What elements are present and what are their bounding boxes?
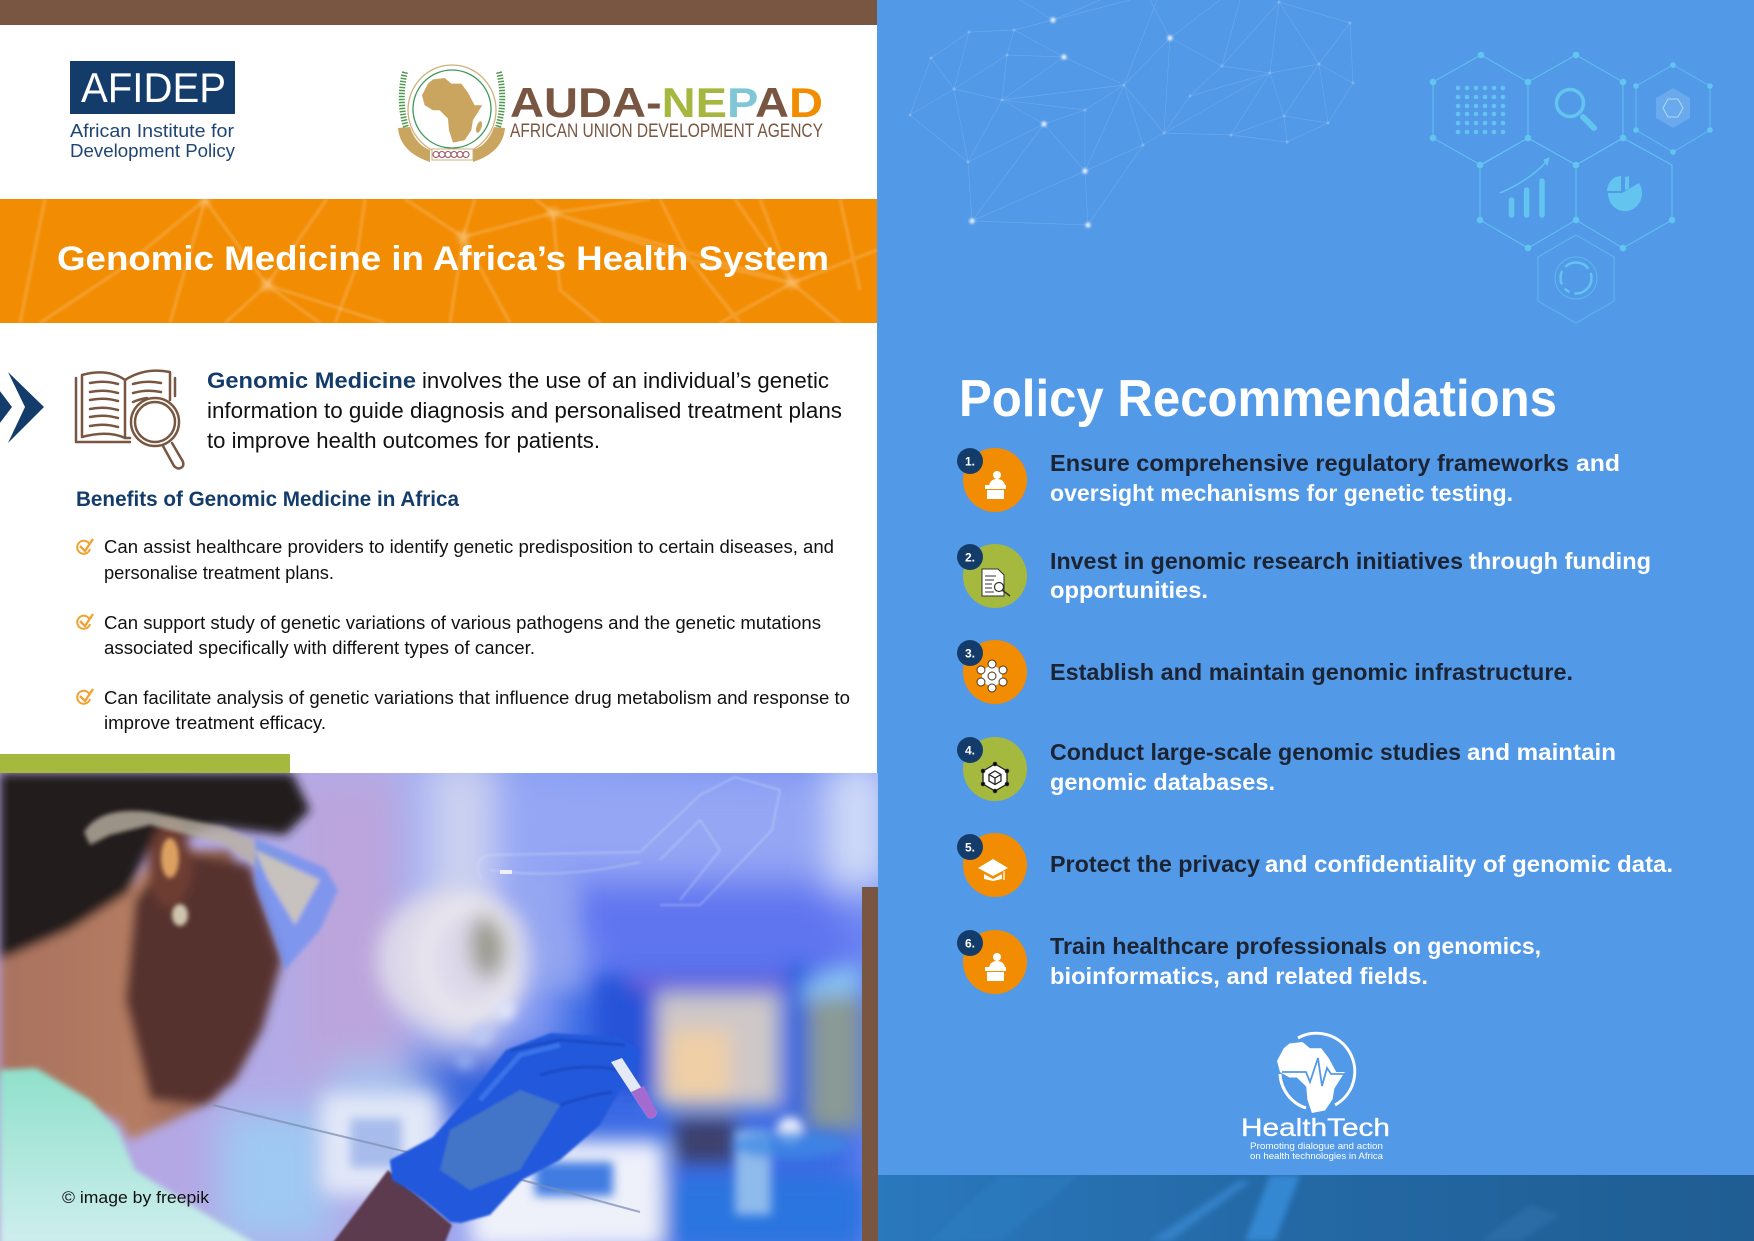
benefit 2: associated specifically with different types of cancer. [104,637,535,658]
chevron arrows [0,372,44,443]
AFIDEP logo: African Institute for [70,120,234,141]
decorative network [908,0,1354,228]
recommendation 1: and [1576,450,1620,476]
icon: dot matrix [1456,86,1505,134]
recommendation 5: and confidentiality of genomic data. [1265,851,1673,877]
recommendation 6: 6. [965,936,975,950]
AFIDEP logo [70,61,236,161]
recommendation 4 [957,737,1616,801]
glass flask reflection [478,777,780,905]
bottom decorative band [878,1175,1754,1241]
green accent bar [0,754,290,773]
benefits list [77,536,850,733]
benefit 1 [77,536,834,583]
recommendation 2: through funding [1469,548,1651,574]
recommendation 6: Train healthcare professionals [1050,933,1387,959]
recommendation 2: 2. [965,550,975,564]
title banner [0,196,877,323]
intro paragraph: involves the use of an individual’s genetic [422,368,829,393]
icon: small hexagon [1656,88,1690,128]
HealthTech logo [1241,1033,1390,1162]
intro paragraph: to improve health outcomes for patients. [207,428,600,453]
intro paragraph [207,368,842,453]
policy list [957,448,1673,994]
arm [331,1170,452,1241]
intro paragraph: Genomic Medicine [207,368,416,393]
recommendation 6: bioinformatics, and related fields. [1050,963,1428,989]
recommendation 2: opportunities. [1050,577,1208,603]
recommendation 6: on genomics, [1393,933,1541,959]
benefits heading: Benefits of Genomic Medicine in Africa [76,488,459,511]
safety goggles [84,811,338,970]
AFIDEP logo: AFIDEP [81,64,226,111]
glass sheet line [213,1105,640,1212]
left panel background [0,0,878,1241]
benefit 2: Can support study of genetic variations of various pathogens and the genetic mutations [104,612,821,633]
decorative hexagon icons [1430,52,1713,323]
title text: Genomic Medicine in Africa’s Health System [57,240,829,278]
icon: bar chart [1500,158,1549,215]
icon: book and magnifier [76,371,183,468]
top brown bar [0,0,877,25]
recommendation 4: Conduct large-scale genomic studies [1050,739,1461,765]
icon: search [1556,90,1594,128]
benefit 2 [77,612,821,658]
benefit 1: personalise treatment plans. [104,562,334,583]
photo: scientist holding test tube [0,760,890,1241]
recommendation 5 [957,833,1673,897]
benefit 3: improve treatment efficacy. [104,712,326,733]
icon: pie chart [1607,176,1642,211]
recommendation 4: and maintain [1467,739,1616,765]
HealthTech logo: on health technologies in Africa [1250,1151,1384,1162]
HealthTech logo: HealthTech [1241,1114,1390,1142]
recommendation 5: Protect the privacy [1050,851,1260,877]
photo credit: © image by freepik [62,1188,210,1207]
recommendation 3: 3. [965,646,975,660]
person [0,773,310,1140]
recommendation 1: 1. [965,454,975,468]
AUDA-NEPAD wordmark: AUDA- NEPAD [510,79,823,126]
recommendation 4: genomic databases. [1050,769,1275,795]
test tube [611,1058,657,1118]
recommendation 6 [957,930,1541,994]
heading: policy recommendations: Policy Recommendations [959,370,1557,428]
recommendation 4: 4. [965,744,975,758]
AUDA-NEPAD wordmark: AFRICAN UNION DEVELOPMENT AGENCY [510,121,823,142]
brown side bar [862,887,878,1241]
recommendation 5: 5. [965,840,975,854]
recommendation 2: Invest in genomic research initiatives [1050,548,1463,574]
icon: dashed ring [1555,257,1597,299]
benefit 1: Can assist healthcare providers to identify genetic predisposition to certain diseases, and [104,536,834,557]
benefit 3: Can facilitate analysis of genetic variations that influence drug metabolism and response to [104,687,850,708]
recommendation 1: Ensure comprehensive regulatory frameworks [1050,450,1569,476]
AUDA-NEPAD emblem [398,65,505,162]
recommendation 1: oversight mechanisms for genetic testing. [1050,480,1513,506]
recommendation 1 [957,448,1620,512]
benefit 3 [77,687,850,733]
AFIDEP logo: Development Policy [70,140,236,161]
recommendation 3 [957,640,1573,704]
recommendation 3: Establish and maintain genomic infrastructure. [1050,659,1573,685]
intro paragraph: information to guide diagnosis and personalised treatment plans [207,398,842,423]
HealthTech logo: Promoting dialogue and action [1250,1141,1383,1152]
right panel background [877,0,1754,1241]
recommendation 2 [957,544,1651,608]
glove [390,1033,640,1223]
